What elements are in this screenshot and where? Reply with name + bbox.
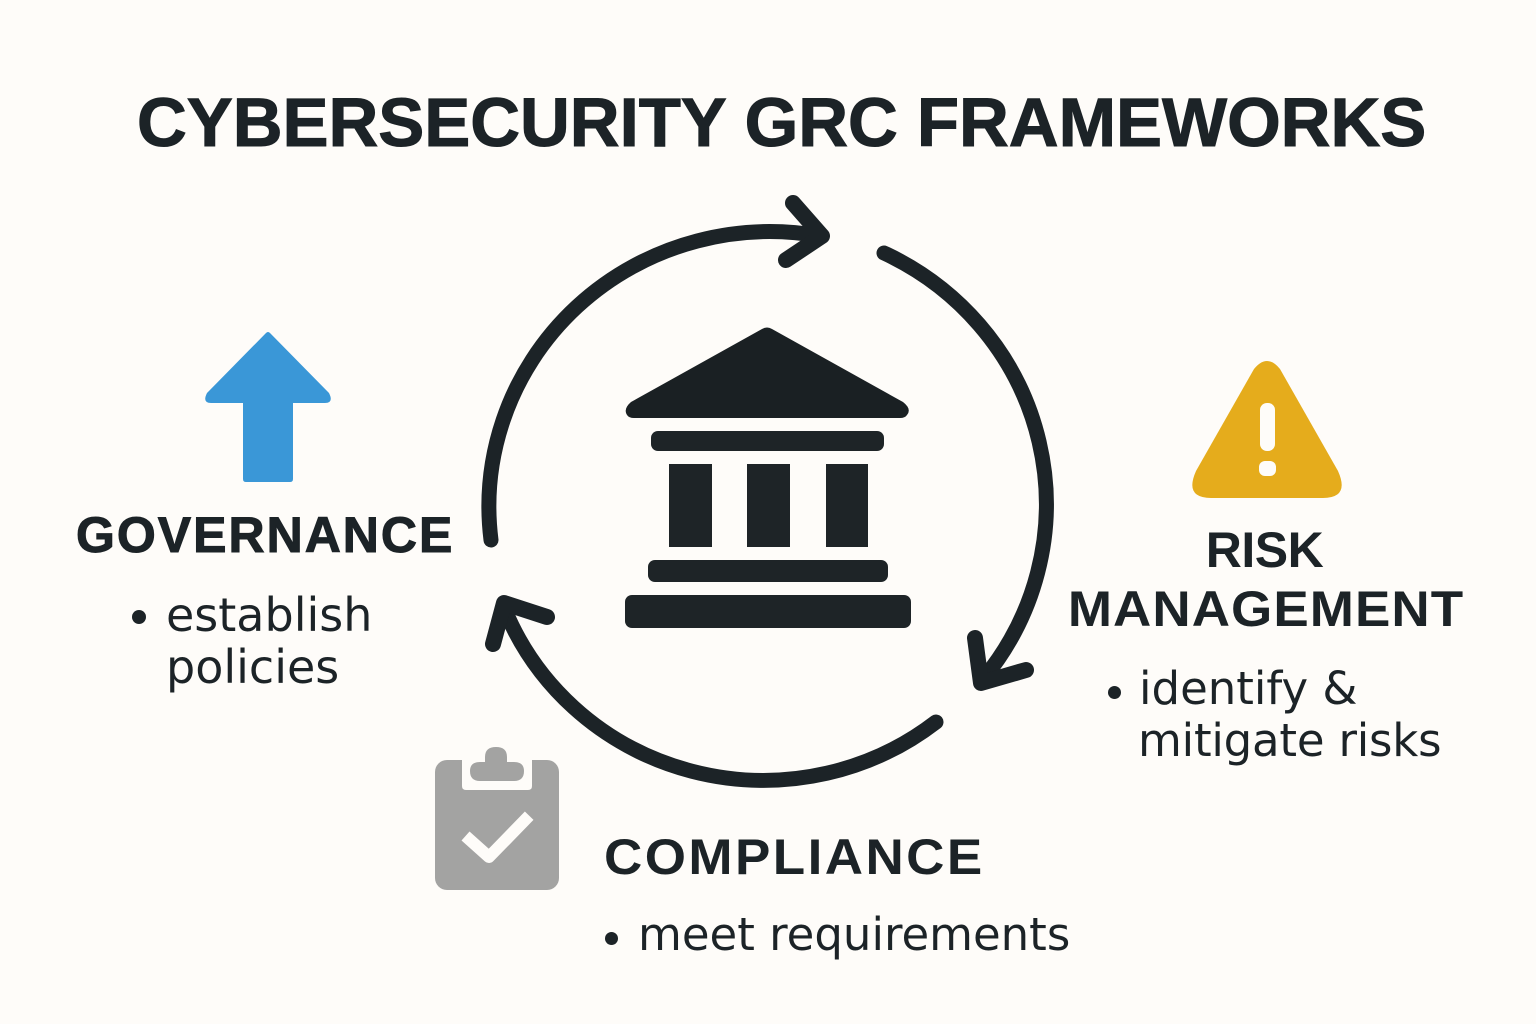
text: compliance bullet: meet requirements (638, 908, 1070, 961)
text: governance bullet (132, 588, 372, 694)
icon: compliance clipboard (435, 747, 559, 890)
text: risk bullet: mitigate risks (1138, 714, 1441, 767)
text: risk bullet (1108, 662, 1441, 767)
arrow: top-left cycle arc (489, 203, 822, 540)
heading: risk management: RISK (1206, 522, 1323, 578)
icon: institution building (625, 328, 911, 628)
heading: governance: GOVERNANCE (76, 507, 454, 563)
heading: risk management (1068, 522, 1464, 637)
arrow: right cycle arc (884, 253, 1046, 683)
text: risk bullet: identify & (1139, 662, 1358, 715)
arrow: bottom cycle arc (493, 603, 936, 780)
heading: compliance: COMPLIANCE (604, 829, 985, 885)
text: governance bullet: policies (166, 640, 339, 694)
heading: risk management: MANAGEMENT (1068, 581, 1464, 637)
title: CYBERSECURITY GRC FRAMEWORKS (137, 84, 1426, 161)
icon: risk warning triangle (1192, 361, 1342, 498)
icon: governance up arrow (205, 332, 331, 482)
text: governance bullet: establish (166, 588, 372, 642)
